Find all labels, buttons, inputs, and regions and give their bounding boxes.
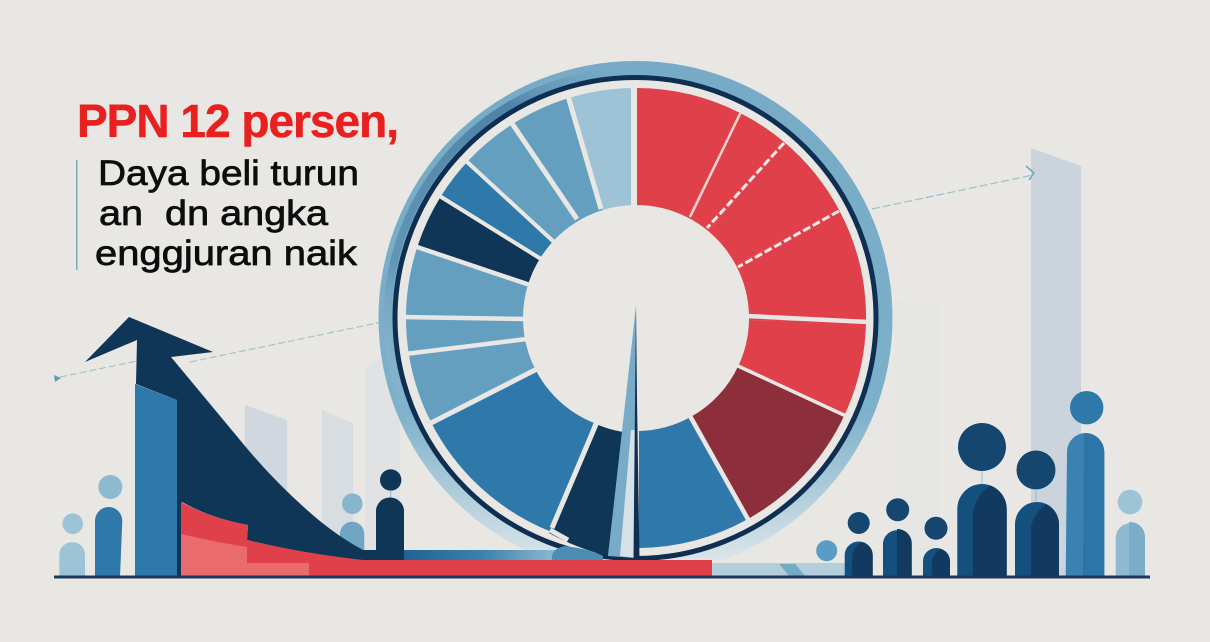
right person 1 [845,512,873,577]
background bars right [895,148,1081,577]
segment: navy bottom [549,424,623,556]
pale bar right of red [712,563,852,577]
subtitle accent line [76,160,78,270]
dashed trend line right with arrow [872,166,1034,209]
right person 7 [1116,490,1145,577]
subtitle: enggjuran naik [95,234,358,273]
segment: pale blue [569,88,636,210]
right dot [816,540,837,561]
segment: navy left [417,196,540,283]
segment: light blue 2 [406,318,524,354]
right person 2 [883,498,912,577]
segment divider lines [402,84,868,540]
right person 4 [957,423,1007,577]
red area under arrow [181,502,712,577]
subtitle: Daya beli turun [98,154,359,193]
segment: light blue 4 [468,124,575,241]
dashed trend line left [54,322,382,382]
segment: mid blue [441,161,553,258]
segment: red 4 [736,210,866,322]
donut chart segments [402,84,868,556]
segment: blue lower left [431,369,594,531]
background bars left [245,360,400,577]
left person 4 [376,469,404,562]
rising arrow navy [85,317,404,577]
rising arrow blue bar [135,384,177,577]
segment: blue bottom [639,417,748,548]
right person 3 [923,517,950,577]
subtitle: an dn angka [99,194,329,233]
segment: dark red [691,366,844,519]
ground line [54,576,1150,578]
right person 5 [1015,450,1059,577]
segment: red 5 [738,320,866,415]
left person 2 [95,475,122,577]
title: PPN 12 persen, [77,95,399,147]
right person 6 [1066,391,1104,577]
segment: red 2 [687,113,784,231]
segment: red 3 [709,142,839,265]
subtitle [95,154,359,273]
segment: red 1 [636,88,740,217]
segment: light blue 5 [512,98,603,223]
gauge needle [608,304,640,558]
left person 3 [340,493,364,577]
segment: light blue 3 [406,247,528,318]
left person 1 [59,513,85,577]
segment: light blue 1 [409,336,535,422]
blue strip behind gauge base [404,546,603,560]
outer gauge ring [388,70,884,566]
